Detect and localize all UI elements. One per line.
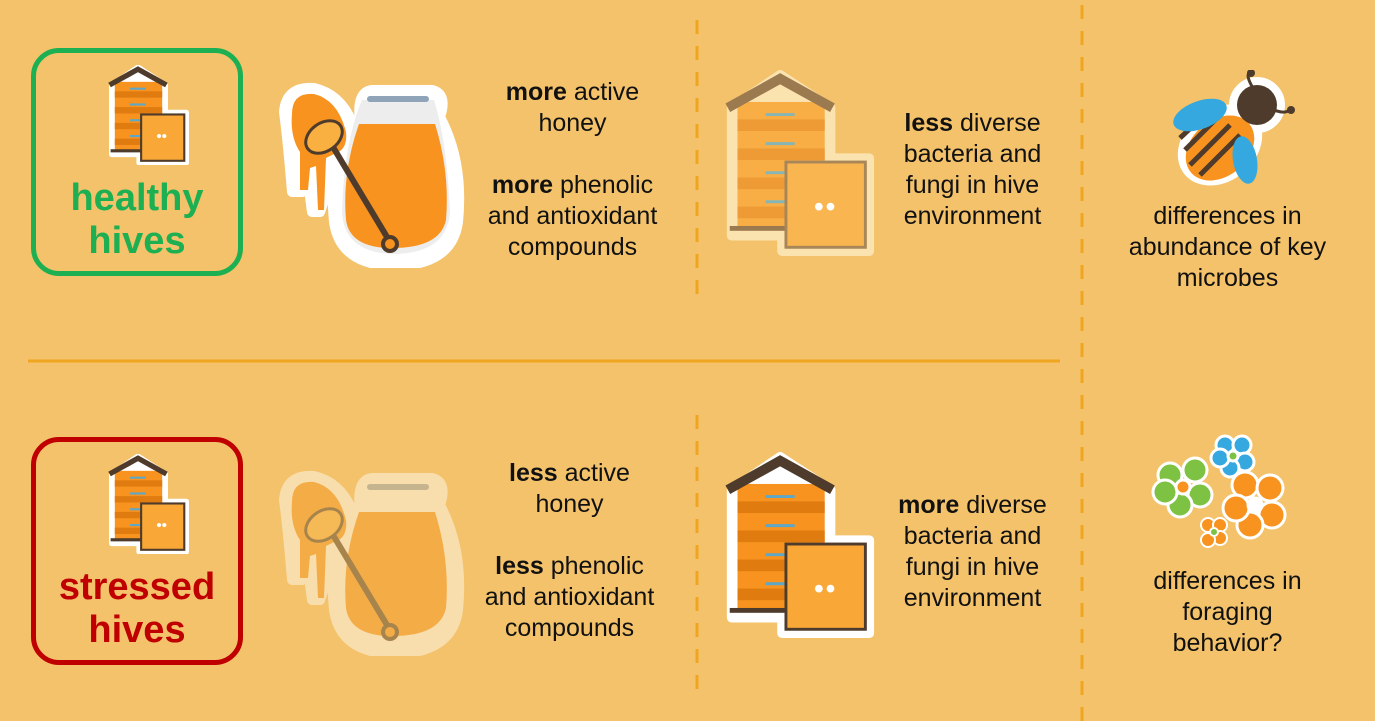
text: foraging: [1153, 567, 1302, 657]
text: healthy hive environment: [904, 109, 1042, 230]
panel: healthy hives label: hives: [88, 220, 186, 262]
text: stressed hive environment: bacteria and: [904, 522, 1041, 550]
text: healthy honey: honey: [538, 109, 607, 137]
panel: healthy hives label: healthy: [70, 177, 204, 219]
text: stressed honey: compounds: [505, 614, 634, 642]
panel: stressed hives label: stressed: [59, 566, 215, 608]
text: stressed hive environment: environment: [904, 584, 1041, 612]
text: bee microbes: differences in: [1153, 202, 1302, 230]
text: stressed honey: less active: [509, 459, 630, 487]
text: foraging: differences in: [1153, 567, 1302, 595]
text: foraging: foraging: [1182, 598, 1273, 626]
text: healthy hive environment: bacteria and: [904, 140, 1041, 168]
icon: bee: [1173, 70, 1295, 186]
text: bee microbes: [1129, 202, 1326, 292]
text: foraging: behavior?: [1173, 629, 1282, 657]
panel: stressed hives label: hives: [88, 609, 186, 651]
panel: healthy hives label: [31, 48, 243, 276]
icon: honey jar stressed (faded): [279, 470, 464, 656]
icon: flowers: [1152, 434, 1286, 548]
text: stressed hive environment: [898, 491, 1047, 612]
icon: honey jar healthy: [279, 82, 464, 268]
text: stressed hive environment: more diverse: [898, 491, 1047, 519]
text: stressed hive environment: fungi in hive: [906, 553, 1039, 581]
text: healthy honey: [488, 78, 658, 261]
text: stressed honey: less phenolic: [495, 552, 644, 580]
text: stressed honey: and antioxidant: [485, 583, 654, 611]
text: healthy hive environment: less diverse: [904, 109, 1041, 137]
text: healthy hive environment: environment: [904, 202, 1041, 230]
text: bee microbes: abundance of key: [1129, 233, 1326, 261]
text: healthy honey: compounds: [508, 233, 637, 261]
icon: big hive stressed: [726, 452, 874, 638]
panel: stressed hives label: [31, 437, 243, 665]
text: healthy honey: more phenolic: [492, 171, 653, 199]
text: healthy hive environment: fungi in hive: [906, 171, 1039, 199]
icon: small hive: [108, 65, 189, 165]
text: healthy honey: more active: [506, 78, 639, 106]
text: healthy honey: and antioxidant: [488, 202, 657, 230]
icon: small hive: [108, 454, 189, 554]
icon: big hive healthy (faded): [726, 70, 874, 256]
text: stressed honey: honey: [535, 490, 604, 518]
text: stressed honey: [485, 459, 654, 642]
text: bee microbes: microbes: [1177, 264, 1278, 292]
